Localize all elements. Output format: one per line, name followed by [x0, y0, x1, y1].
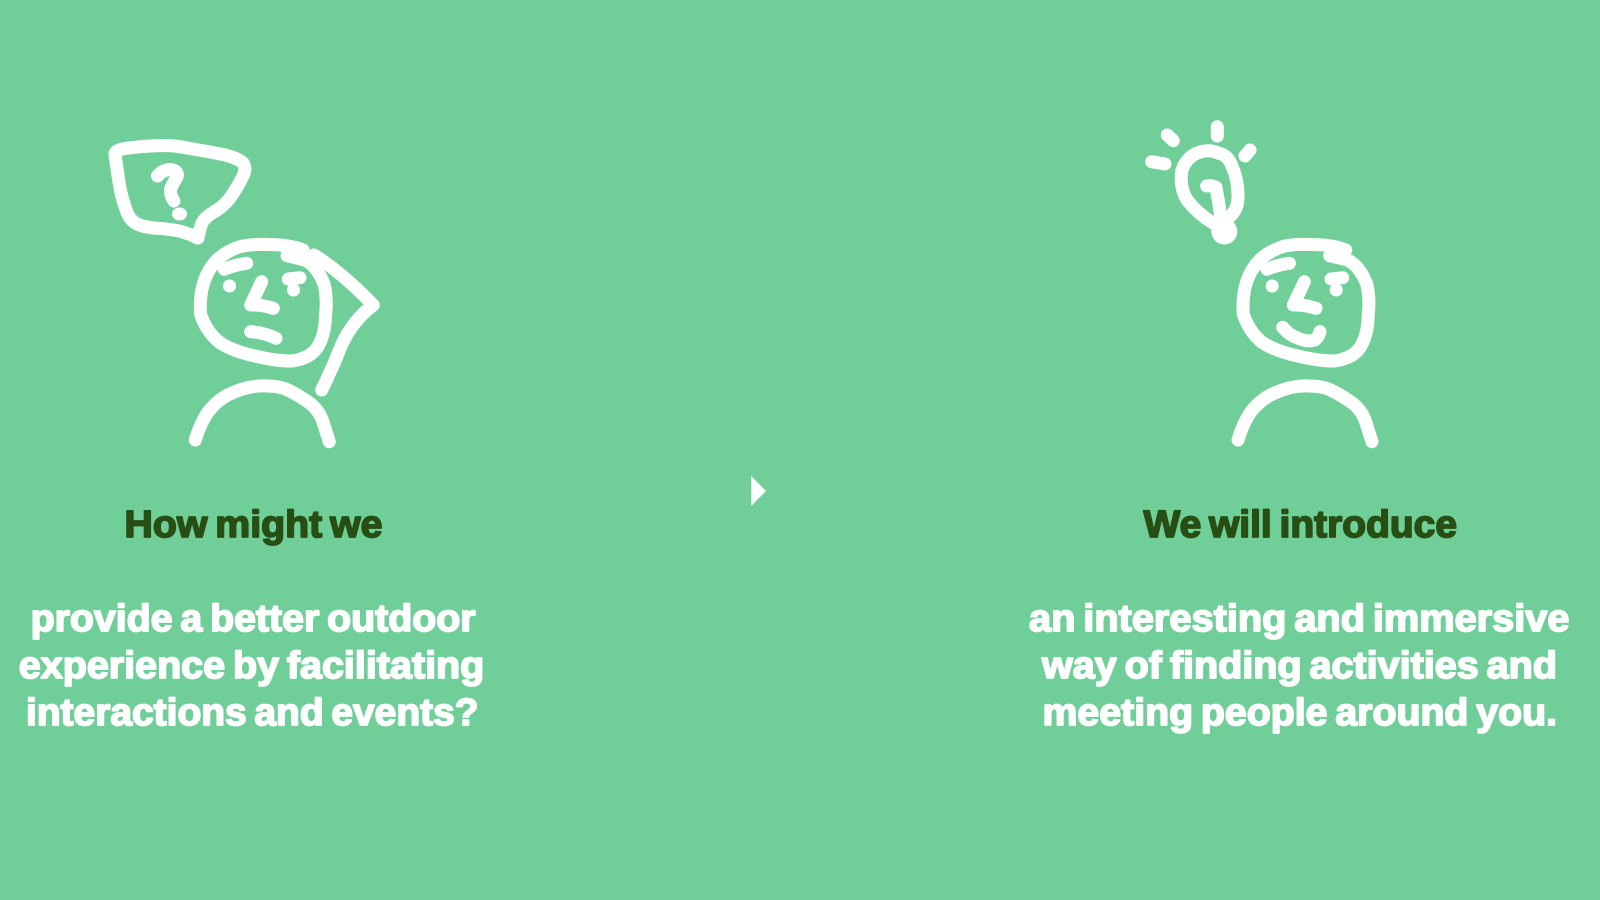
nose — [1293, 282, 1316, 308]
arrow: triangle pointing right — [751, 476, 766, 506]
flat mouth — [251, 332, 276, 338]
solution statement text: an interesting and immersive — [1029, 598, 1570, 640]
panel: problem (how might we) — [19, 146, 484, 734]
icon: smiling person — [1238, 244, 1372, 442]
left brow — [1267, 263, 1289, 269]
right brow — [288, 278, 300, 279]
problem statement text: interactions and events? — [26, 692, 478, 734]
heading: how might we: How might we — [124, 504, 382, 546]
icon: light bulb idea — [1152, 127, 1250, 244]
panel: solution (we will introduce) — [1029, 127, 1570, 734]
solution statement text: meeting people around you. — [1042, 692, 1557, 734]
solution statement text: way of finding activities and — [1041, 645, 1557, 687]
shoulders — [1238, 386, 1372, 442]
head outline — [200, 244, 326, 361]
head outline — [1243, 244, 1369, 361]
shoulders — [195, 386, 329, 442]
left eye — [223, 280, 236, 292]
left brow — [224, 263, 247, 269]
heading: we will introduce: We will introduce — [1144, 504, 1457, 546]
right eye — [1330, 284, 1343, 296]
right brow — [1331, 278, 1343, 279]
icon: thinking person scratching head — [195, 244, 373, 442]
icon: speech bubble with question mark — [115, 146, 245, 238]
nose — [251, 282, 273, 308]
solution statement text — [1029, 598, 1570, 734]
left eye — [1266, 280, 1279, 292]
problem statement text: experience by facilitating — [19, 645, 484, 687]
raised arm — [314, 255, 373, 390]
right eye — [287, 284, 300, 296]
smile — [1283, 327, 1320, 341]
problem statement text: provide a better outdoor — [31, 598, 476, 640]
problem statement text — [19, 598, 484, 734]
